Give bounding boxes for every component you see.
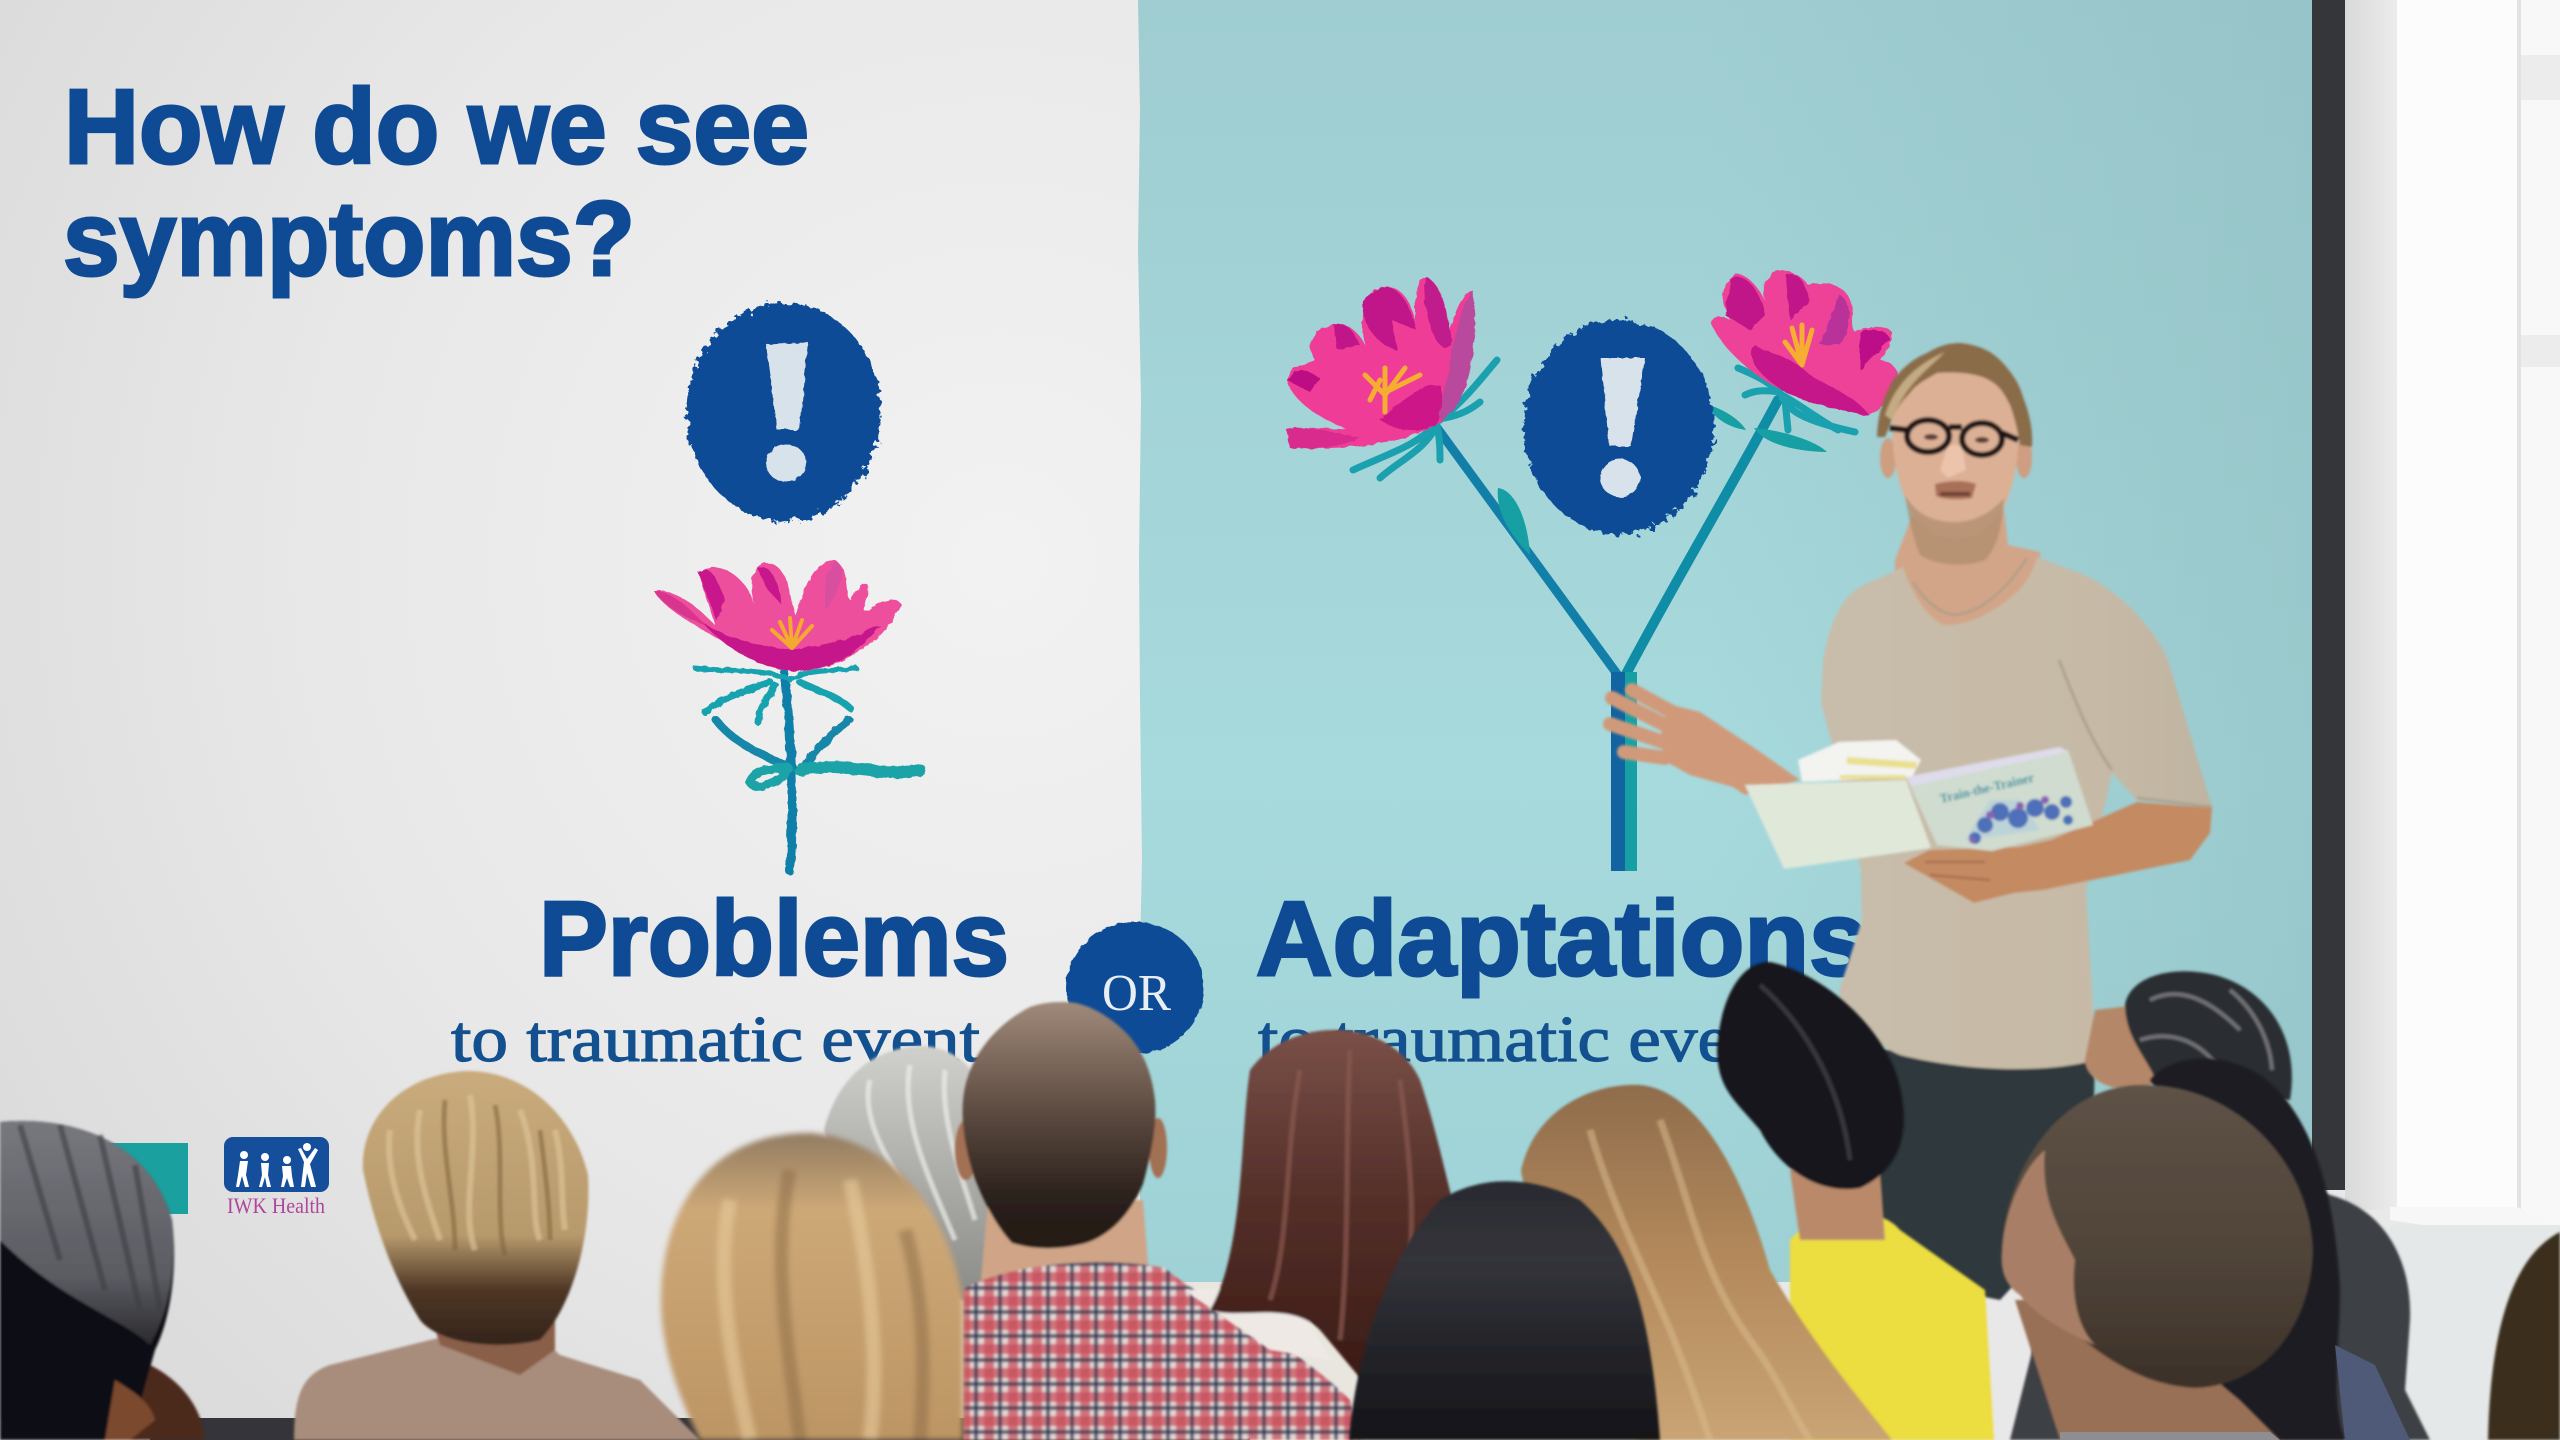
title (63, 68, 809, 298)
book pages (1798, 740, 1921, 782)
icon: single flower (653, 560, 920, 871)
stems (1435, 400, 1778, 871)
person: bald man (955, 1002, 1360, 1440)
collar line (1913, 558, 2027, 615)
person: short blond hair (294, 1071, 700, 1440)
person: long blonde hair (661, 1133, 963, 1440)
plaid shirt (963, 1262, 1360, 1440)
left flower (1287, 277, 1497, 478)
knuckle lines (1925, 862, 1990, 880)
icon: exclamation mark circle (left) (687, 303, 881, 521)
book left page (1745, 780, 1931, 869)
right forearm and hand (1904, 802, 2212, 903)
left arm and hand (1610, 690, 1800, 795)
person: wavy blonde hair (1521, 1085, 1892, 1440)
title: symptoms? (63, 180, 635, 298)
logo: teal square (100, 1143, 188, 1214)
person: woman with long dark hair (2150, 1059, 2345, 1440)
title: How do we see (64, 68, 809, 186)
person: long black hair (1349, 1181, 1660, 1440)
sleeve seam (2059, 660, 2212, 807)
projection screen bottom edge (150, 1416, 1250, 1440)
person: far right edge (2488, 1232, 2560, 1440)
exclamation mark circle (right) (1524, 320, 1714, 534)
panel: adaptations (teal right half) (1138, 0, 2312, 1418)
heading: Adaptations: Adaptations (1256, 880, 1868, 998)
book cover: Train-the-Trainer (1938, 770, 2035, 806)
flower petals (653, 560, 902, 671)
audience (0, 962, 2560, 1440)
logo: IWK Health (224, 1137, 329, 1218)
jeans (1855, 1050, 2095, 1300)
person: profile man with jacket (2010, 971, 2430, 1440)
person: far left with gray beanie (0, 1121, 204, 1440)
screen frame: dark right bezel (2310, 0, 2345, 1190)
head (1892, 370, 2018, 538)
mouth (1935, 481, 1976, 499)
person: gray hair (824, 1046, 990, 1300)
ears (1880, 438, 2032, 478)
neck (1895, 500, 2040, 640)
icon: branched flowers and exclamation mark (1287, 271, 1898, 871)
person: turban man (1717, 962, 1994, 1440)
heading: Problems: Problems (539, 880, 1009, 998)
room wall and window at right (2300, 0, 2560, 1440)
book cover (1906, 747, 2093, 851)
subheading: to traumatic event (left): to traumatic event (451, 1003, 980, 1076)
person: front man with short hair (2002, 1085, 2313, 1440)
blond highlight in hair (1885, 352, 1945, 420)
subheading: to traumatic event (right): to traumatic event (1258, 1003, 1787, 1076)
person: woman with red-brown hair (1184, 1030, 1464, 1390)
person: bottom-right collar (2060, 1432, 2280, 1440)
jacket striped hem (2335, 1345, 2410, 1440)
nose (1940, 445, 1966, 478)
eyes (1924, 434, 1989, 443)
badge: OR: OR (1102, 965, 1171, 1022)
stem and leaves (695, 668, 920, 871)
ears (955, 1118, 1167, 1180)
under-screen pale strip (1138, 1282, 1438, 1418)
logo: IWK Health: IWK Health (227, 1193, 325, 1218)
badge: OR (1066, 922, 1204, 1054)
glasses (1890, 420, 2018, 455)
presenter (1610, 343, 2212, 1300)
beard stubble (1905, 495, 2004, 565)
leaves (1498, 405, 1827, 555)
shirt (1821, 557, 2212, 1069)
panel: problems (light gray left half) (0, 0, 1150, 1418)
right flower (1712, 271, 1898, 432)
stamens (772, 618, 812, 648)
hair (1877, 343, 2032, 447)
